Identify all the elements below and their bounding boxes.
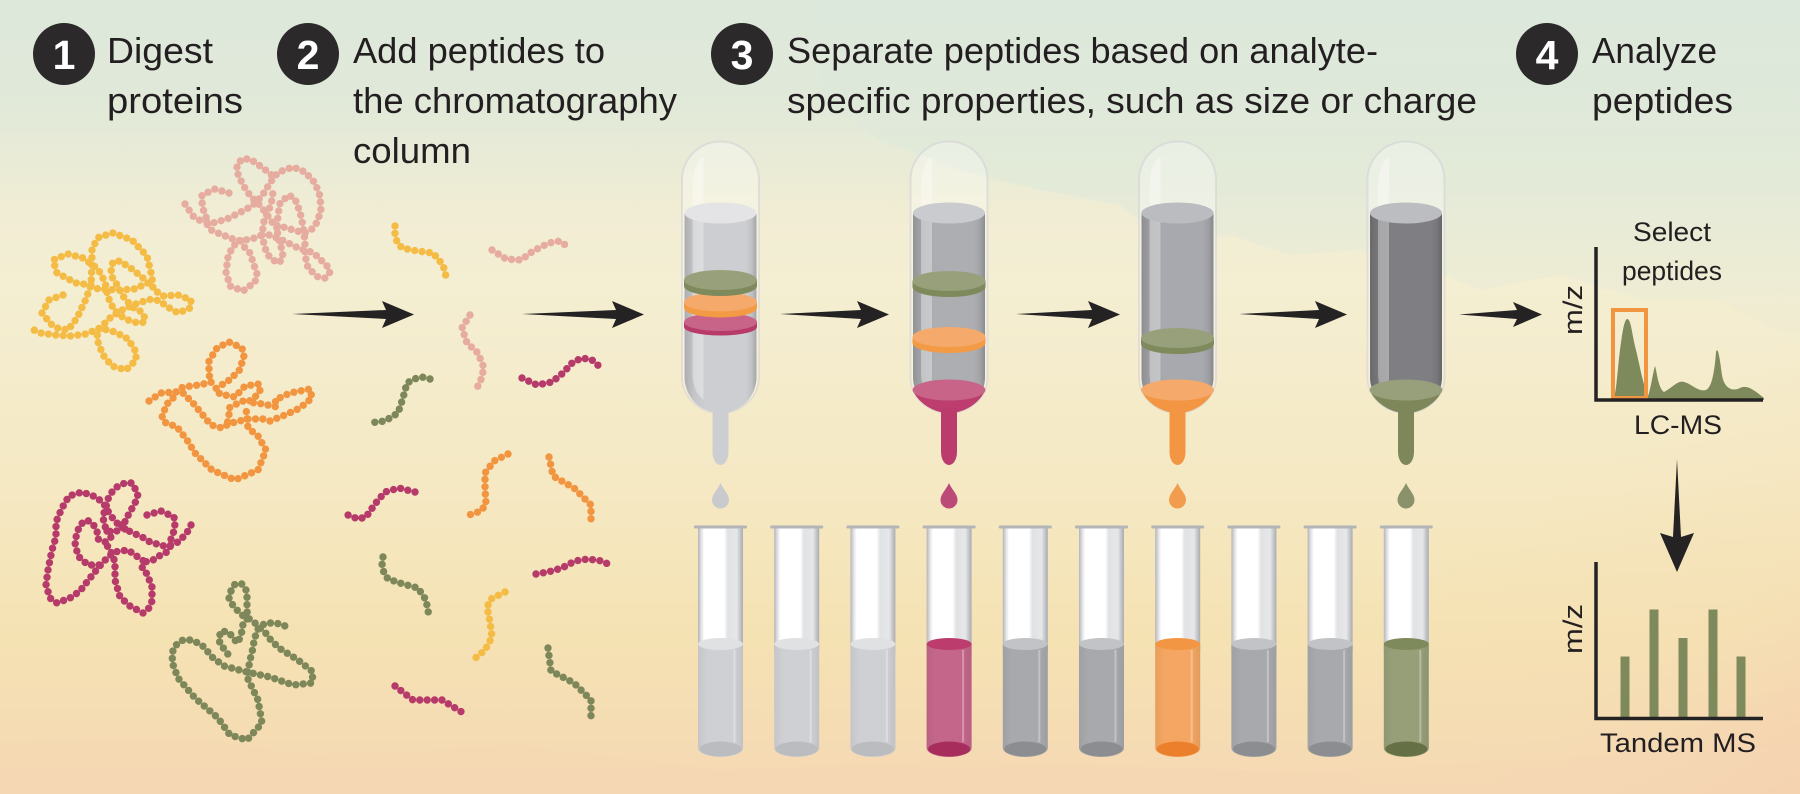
step 2 heading: 2 — [297, 32, 319, 78]
step 2 heading: column — [353, 130, 471, 171]
step 2 heading: Add peptides to — [353, 30, 605, 71]
step 4 heading: Analyze — [1592, 30, 1717, 71]
arrow: column 3 to 4 — [1239, 301, 1347, 328]
protein: magenta — [46, 483, 191, 613]
step 1 heading: Digest — [107, 30, 213, 71]
column 1 — [682, 141, 759, 508]
step 4 heading: 4 — [1536, 32, 1559, 78]
protein: green — [172, 584, 313, 740]
step 3 heading — [711, 23, 1477, 121]
step 4 heading — [1516, 23, 1733, 121]
step 1 heading: 1 — [53, 32, 75, 78]
step 3 heading: Separate peptides based on analyte- — [787, 30, 1378, 71]
step 2 heading — [277, 23, 678, 171]
step 1 heading: proteins — [107, 80, 243, 121]
arrow: LC-MS to tandem MS — [1660, 459, 1694, 572]
column 4 — [1368, 141, 1444, 508]
step 3 heading: specific properties, such as size or charge — [787, 80, 1477, 121]
protein: pink — [185, 159, 330, 291]
chart: LC-MS — [1558, 217, 1764, 440]
arrow: column 2 to 3 — [1016, 301, 1120, 328]
arrow: column 4 to LC-MS — [1459, 302, 1542, 327]
chart: tandem MS: Tandem MS — [1600, 728, 1756, 758]
chart: LC-MS: Select — [1633, 217, 1712, 247]
column 2 — [910, 141, 988, 508]
step 1 heading — [33, 23, 243, 121]
chart: tandem MS: m/z — [1558, 604, 1588, 654]
protein: orange — [149, 342, 312, 480]
chart: LC-MS: LC-MS — [1634, 410, 1722, 440]
chart: LC-MS: m/z — [1558, 285, 1588, 335]
peptides — [343, 226, 612, 717]
arrow: digest to peptides — [292, 301, 414, 328]
chart: LC-MS: peptides — [1622, 256, 1722, 286]
arrow: column 1 to 2 — [780, 301, 889, 328]
step 3 heading: 3 — [731, 32, 753, 78]
arrow: peptides to column — [522, 301, 644, 328]
chart: tandem MS — [1558, 562, 1763, 758]
column 3 — [1139, 141, 1216, 508]
step 2 heading: the chromatography — [353, 80, 678, 121]
step 4 heading: peptides — [1592, 80, 1733, 121]
collection tubes — [694, 526, 1433, 757]
protein: yellow — [34, 233, 191, 370]
